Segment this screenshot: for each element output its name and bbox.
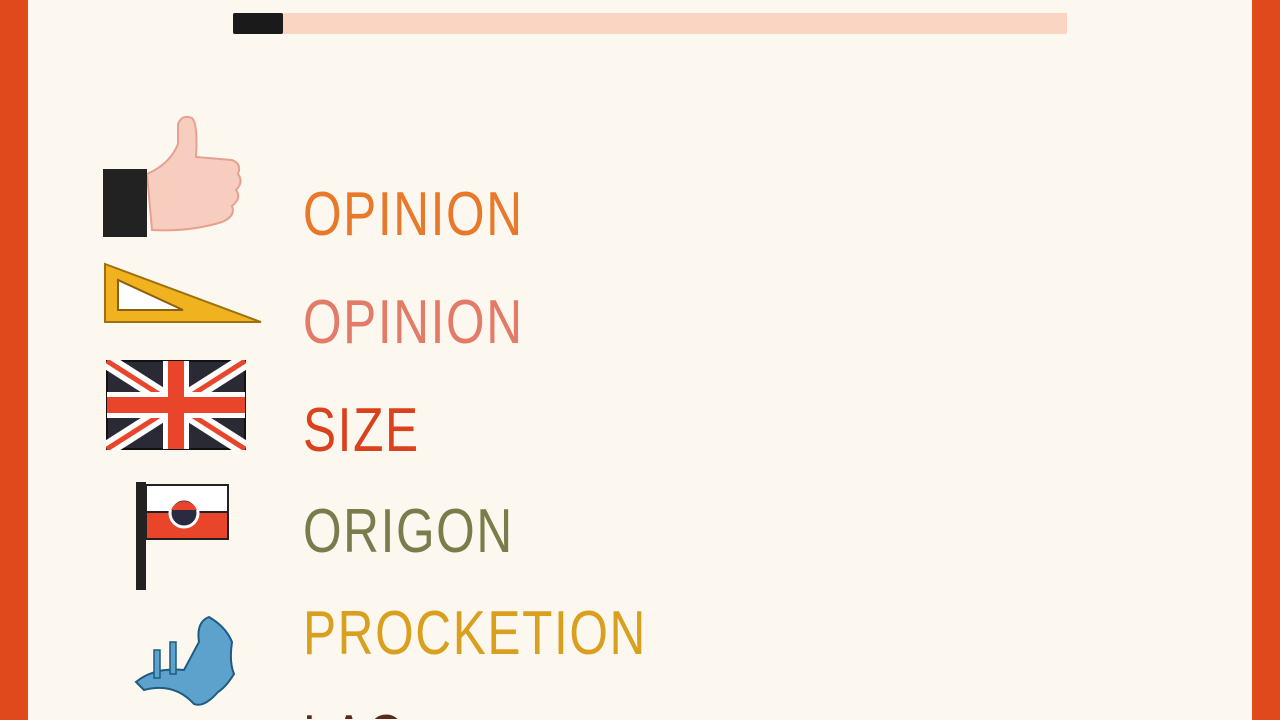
icon: thumbs up xyxy=(103,116,242,237)
text: opinion 2: OPINION xyxy=(303,288,524,357)
text: size: SIZE xyxy=(303,396,420,465)
text: prockbetion: PROCKETION xyxy=(303,599,647,668)
icon: set square xyxy=(104,262,262,323)
icon: flag xyxy=(136,482,229,590)
text: opinion 1: OPINION xyxy=(303,180,524,249)
icon: union jack xyxy=(106,360,246,450)
text: origon: ORIGON xyxy=(303,497,514,566)
progress bar xyxy=(233,13,1067,34)
icon: blue shape xyxy=(134,616,236,706)
